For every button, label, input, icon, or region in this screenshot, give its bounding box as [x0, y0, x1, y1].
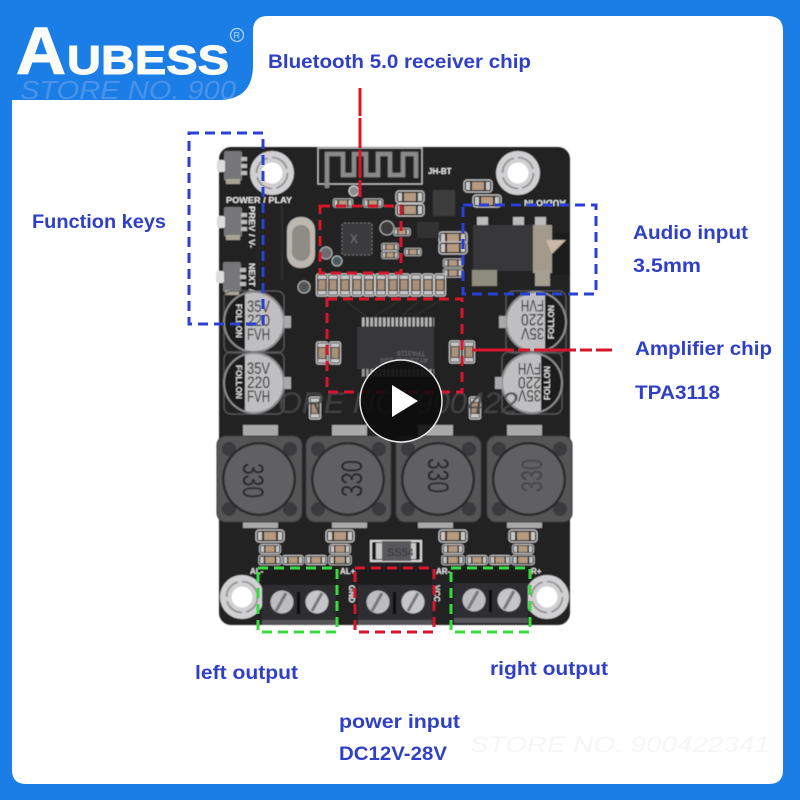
- watermark: store number bottom: STORE NO. 900422341: [470, 732, 770, 757]
- function buttons: [216, 151, 247, 295]
- electrolytic capacitors: FVH: [518, 359, 541, 378]
- left output dashed box: [258, 568, 337, 632]
- silkscreen: JH-BT: JH-BT: [428, 167, 452, 176]
- logo: Aubess: UBESS: [67, 37, 229, 83]
- Bluetooth chip dashed box: [320, 206, 401, 273]
- silkscreen: AUDIO IN: AUDIO IN: [524, 198, 566, 207]
- amplifier chip: AY23ATSP1G4: [380, 356, 428, 363]
- label: Function keys: Function keys: [32, 212, 166, 233]
- electrolytic capacitors: FOLLON: [234, 304, 243, 338]
- logo: Aubess: [16, 14, 244, 89]
- electrolytic capacitors: FOLLON: [547, 305, 556, 339]
- Bluetooth antenna: [318, 148, 422, 188]
- silkscreen: terminal labels: AR-: [436, 567, 451, 576]
- electrolytic capacitors: 35V: [520, 324, 544, 343]
- amplifier chip dashed box: [327, 299, 462, 392]
- silkscreen: terminal labels: GND: [347, 585, 356, 603]
- components around amplifier: [310, 341, 480, 419]
- silkscreen: button labels: [226, 196, 293, 305]
- audio jack: [472, 217, 570, 286]
- amplifier leader line: [472, 348, 612, 352]
- resistor row: [316, 274, 446, 296]
- watermark: store number centre: ORE NO. 900422: [278, 387, 518, 420]
- video play button: [360, 360, 442, 442]
- electrolytic capacitors: [223, 291, 567, 414]
- electrolytic capacitors: 220: [521, 310, 544, 329]
- mounting holes: [220, 151, 569, 619]
- crystal oscillator: [287, 217, 315, 268]
- audio input dashed box: [463, 205, 596, 294]
- electrolytic capacitors: 220: [247, 373, 270, 392]
- electrolytic capacitors: 35V: [247, 297, 271, 316]
- label: Amplifier chip: Amplifier chip: [635, 339, 772, 360]
- inductors: [217, 436, 572, 522]
- inductors: 330: [421, 458, 454, 493]
- silkscreen: terminal labels: [250, 567, 542, 603]
- amplifier chip: TPA3118: [397, 349, 425, 356]
- inductors: 330: [336, 460, 369, 497]
- terminal blocks: [262, 568, 528, 625]
- silkscreen: button labels: NEXT / V+: [247, 263, 256, 305]
- watermark: store number top: STORE NO. 900: [20, 75, 237, 105]
- electrolytic capacitors: FVH: [247, 325, 270, 344]
- logo: Aubess: A: [16, 14, 66, 89]
- inductors: 330: [516, 459, 549, 492]
- electrolytic capacitors: 220: [247, 311, 270, 330]
- circuit board: [216, 147, 572, 625]
- label: left output: left output: [195, 663, 299, 684]
- electrolytic capacitors: FVH: [247, 387, 270, 406]
- label: right output: right output: [490, 659, 609, 680]
- power input dashed box: [355, 568, 434, 632]
- silkscreen: terminal labels: AL-: [250, 567, 264, 576]
- function keys dashed box: [189, 133, 263, 324]
- label: power input: power input: [339, 712, 461, 733]
- electrolytic capacitors: FOLLON: [543, 366, 552, 400]
- label: TPA3118: TPA3118: [635, 383, 720, 404]
- label: 3.5mm: 3.5mm: [633, 256, 701, 277]
- Bluetooth leader line: [358, 88, 362, 197]
- PCB traces: [282, 200, 440, 318]
- inductor tabs: [243, 425, 542, 528]
- silkscreen: terminal labels: AL+: [340, 567, 356, 576]
- small components near Bluetooth chip: [298, 180, 501, 293]
- electrolytic capacitors: FVH: [521, 296, 544, 315]
- inductors: 330: [236, 463, 269, 498]
- logo: Aubess: R: [234, 30, 240, 40]
- label: Audio input: Audio input: [633, 223, 749, 244]
- Bluetooth chip: [342, 223, 372, 255]
- electrolytic capacitors: 35V: [247, 359, 271, 378]
- silkscreen: button labels: POWER / PLAY: [226, 196, 293, 205]
- diode SS54: SS54: [387, 547, 414, 559]
- silkscreen: terminal labels: R+: [531, 567, 542, 576]
- label: DC12V-28V: DC12V-28V: [339, 744, 447, 765]
- Bluetooth chip: X: [350, 232, 358, 246]
- amplifier chip: [357, 322, 434, 372]
- electrolytic capacitors: 35V: [517, 386, 541, 405]
- electrolytic capacitors: 220: [518, 373, 541, 392]
- SMD parts above terminals: [256, 530, 537, 565]
- right output dashed box: [451, 568, 530, 632]
- electrolytic capacitors: FOLLON: [234, 365, 243, 399]
- diode SS54: [370, 540, 422, 562]
- label: Bluetooth chip: Bluetooth 5.0 receiver chip: [268, 52, 531, 73]
- silkscreen: button labels: PREV / V-: [247, 206, 256, 248]
- silkscreen: terminal labels: VCC: [432, 585, 441, 602]
